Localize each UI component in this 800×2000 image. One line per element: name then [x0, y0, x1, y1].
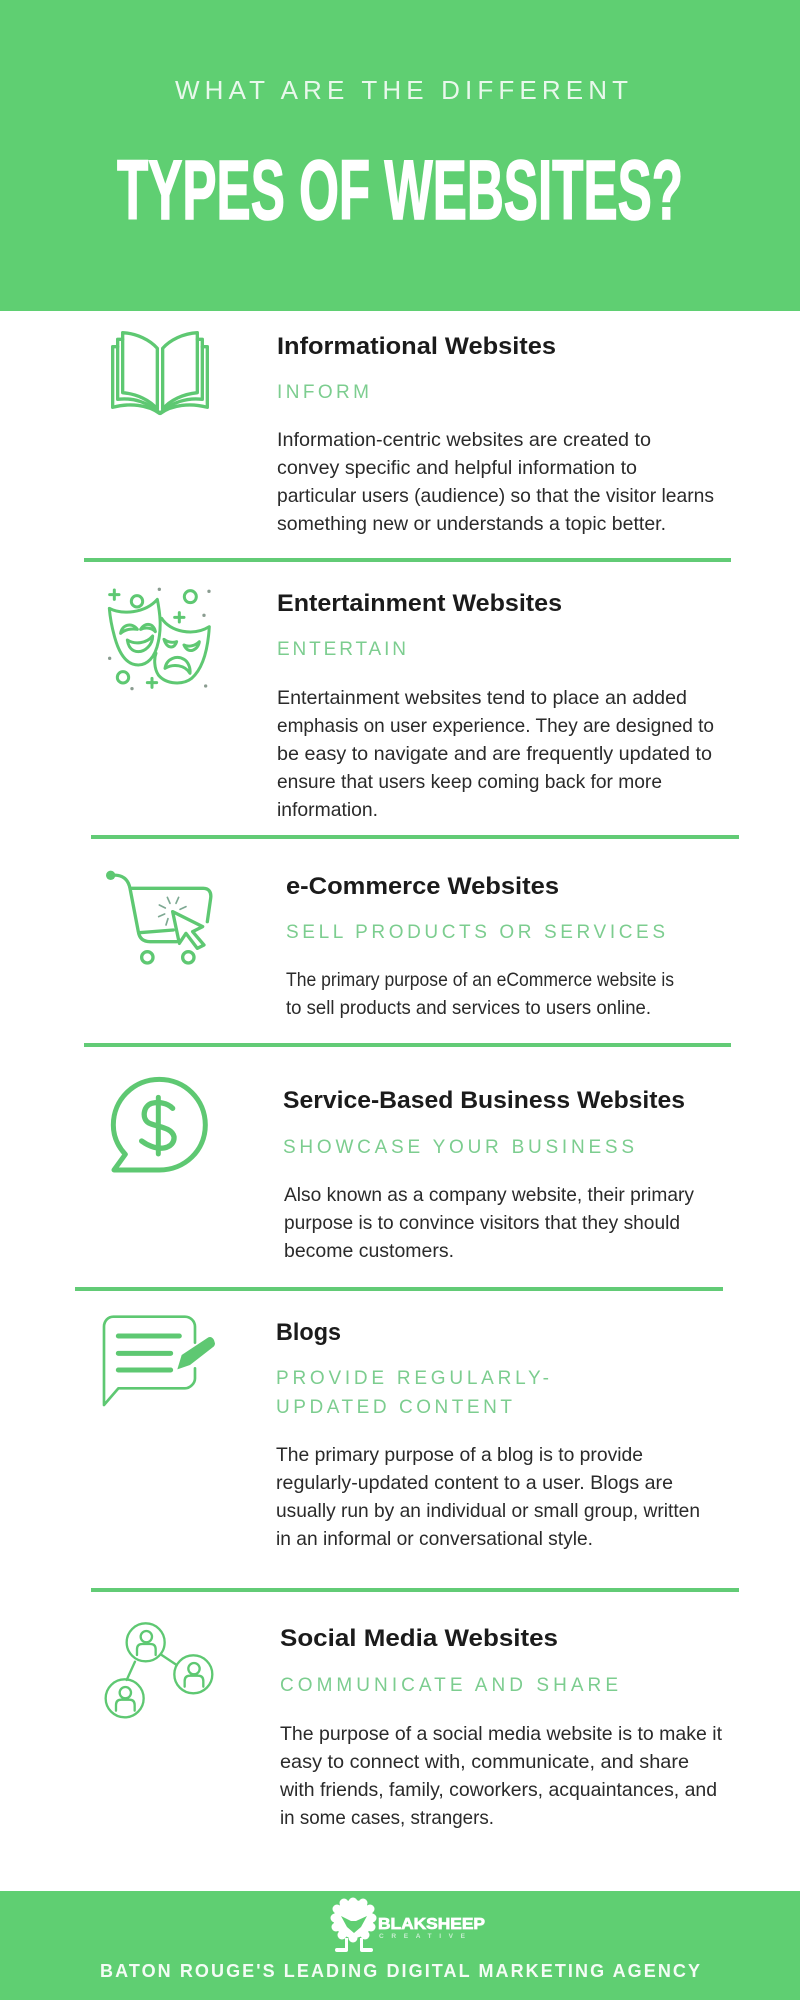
panel: e-commerce websites [106, 871, 674, 1019]
description: Entertainment websites tend to place an added [277, 687, 687, 709]
description: purpose is to convince visitors that they should [284, 1212, 680, 1234]
description [284, 1184, 694, 1262]
description: to sell products and services to users online. [286, 997, 651, 1019]
icon: dollar speech bubble [113, 1079, 205, 1170]
icon: theatre masks [108, 588, 211, 690]
tagline: BATON ROUGE'S LEADING DIGITAL MARKETING AGENCY [100, 1961, 700, 1981]
icon: comment with pencil [104, 1317, 215, 1405]
description: information. [277, 799, 378, 821]
description: in an informal or conversational style. [276, 1528, 593, 1550]
purpose label: ENTERTAIN [277, 639, 406, 660]
panel: service-based business websites [113, 1079, 694, 1262]
description: Also known as a company website, their primary [284, 1184, 694, 1206]
heading: e-Commerce Websites [286, 873, 559, 900]
logo: creative: CREATIVE [379, 1933, 466, 1940]
description: particular users (audience) so that the visitor learns [277, 485, 714, 507]
description: something new or understands a topic better. [277, 513, 666, 535]
subtitle: WHAT ARE THE DIFFERENT [175, 75, 628, 105]
description: The purpose of a social media website is to make it [280, 1723, 723, 1745]
heading: Informational Websites [277, 333, 556, 360]
description [286, 969, 674, 1019]
description [277, 687, 714, 821]
logo: wordmark: BLAKSHEEP [378, 1916, 485, 1933]
description: usually run by an individual or small group, written [276, 1500, 700, 1522]
description [276, 1444, 700, 1550]
purpose label [276, 1368, 549, 1418]
description: The primary purpose of a blog is to provide [276, 1444, 643, 1466]
description: in some cases, strangers. [280, 1807, 494, 1829]
description: easy to connect with, communicate, and share [280, 1751, 689, 1773]
heading: Blogs [276, 1319, 341, 1346]
heading: Service-Based Business Websites [283, 1087, 685, 1114]
description: Information-centric websites are created to [277, 429, 651, 451]
icon: connected people [106, 1623, 212, 1717]
description: convey specific and helpful information to [277, 457, 637, 479]
description: regularly-updated content to a user. Blogs are [276, 1472, 673, 1494]
description [279, 1723, 723, 1829]
panel: entertainment websites [108, 588, 714, 821]
heading: Social Media Websites [280, 1625, 558, 1652]
panel: header banner [0, 0, 800, 311]
description: be easy to navigate and are frequently updated to [277, 743, 712, 765]
panel: blogs [104, 1317, 700, 1550]
description: emphasis on user experience. They are designed to [277, 715, 714, 737]
description: ensure that users keep coming back for more [277, 771, 662, 793]
purpose label: UPDATED CONTENT [276, 1397, 512, 1418]
purpose label: SELL PRODUCTS OR SERVICES [286, 922, 665, 943]
logo: sheep mascot [330, 1898, 376, 1952]
description: become customers. [284, 1240, 454, 1262]
purpose label: PROVIDE REGULARLY- [276, 1368, 549, 1389]
icon: shopping cart with cursor [106, 871, 211, 963]
description [277, 429, 714, 535]
purpose label: SHOWCASE YOUR BUSINESS [283, 1137, 634, 1158]
purpose label: COMMUNICATE AND SHARE [280, 1675, 618, 1696]
description: The primary purpose of an eCommerce website is [286, 969, 674, 991]
panel: social media websites [106, 1623, 723, 1829]
purpose label: INFORM [277, 382, 369, 403]
heading: Entertainment Websites [277, 590, 562, 617]
panel: informational websites [113, 333, 714, 535]
description: with friends, family, coworkers, acquaintances, and [279, 1779, 717, 1801]
icon: open book [113, 333, 207, 413]
panel: footer [0, 1891, 800, 2000]
